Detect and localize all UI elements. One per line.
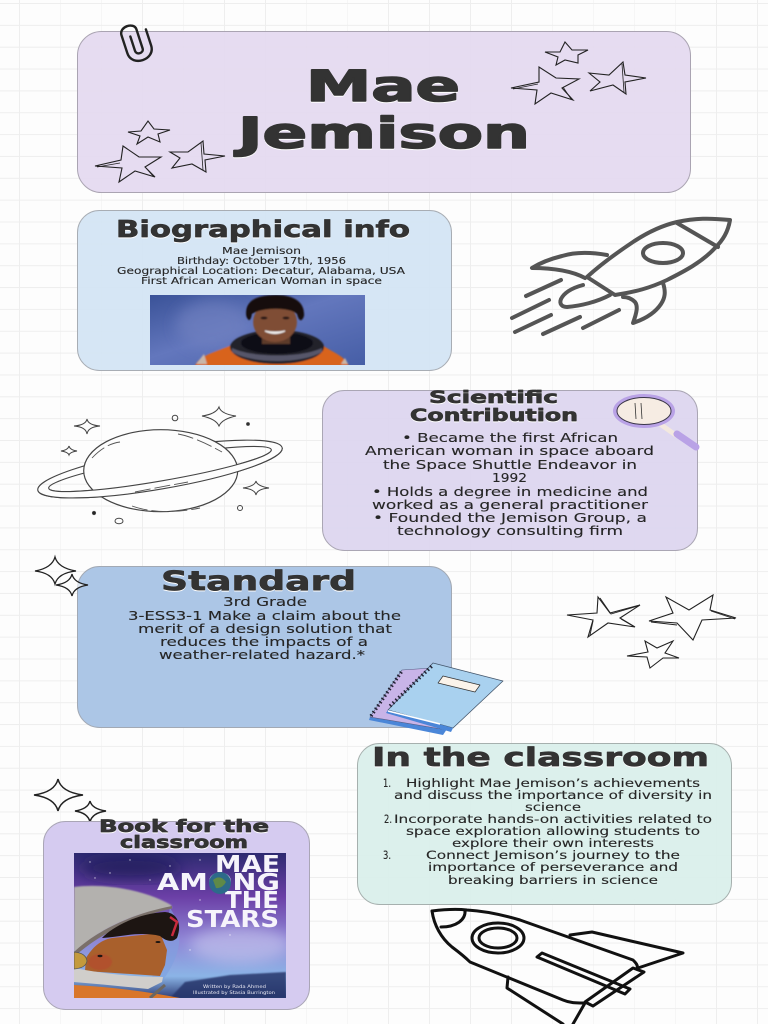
icon: stars bottom left xyxy=(95,121,225,182)
heading: in the classroom: In the classroom xyxy=(372,743,709,773)
text: standard description: 3rd Grade xyxy=(223,595,307,610)
image: book cover: Written by Rada Ahmed xyxy=(203,984,266,989)
text: contribution bullets: • Founded the Jemison Group, a xyxy=(373,511,647,526)
heading: book for the classroom: classroom xyxy=(120,833,248,852)
text: standard description: 3-ESS3-1 Make a claim about the xyxy=(128,609,401,624)
icon: magnifying glass xyxy=(613,394,696,447)
icon: paperclip xyxy=(119,21,155,64)
text: numbered classroom ideas: importance of perseverance and xyxy=(428,860,678,874)
text: numbered classroom ideas: space exploration allowing students to xyxy=(406,824,700,838)
text: contribution bullets: • Holds a degree in medicine and xyxy=(372,485,648,500)
text: biography details: First African American Woman in space xyxy=(141,276,382,287)
text: biography details: Geographical Location: Decatur, Alabama, USA xyxy=(117,266,405,277)
text: biography details: Mae Jemison xyxy=(222,246,301,257)
text: standard description: merit of a design solution that xyxy=(138,622,392,637)
icon: ringed planet xyxy=(34,407,286,524)
icon: grey rocket xyxy=(512,219,730,334)
text: standard description: weather-related hazard.* xyxy=(159,648,366,663)
text: contribution bullets: technology consulting firm xyxy=(397,524,623,539)
panel: scientific contribution xyxy=(322,388,698,550)
text: contribution bullets xyxy=(365,431,654,539)
text: contribution bullets: • Became the first African xyxy=(402,431,618,446)
text: numbered classroom ideas: 2. xyxy=(384,812,392,826)
heading: Mae Jemison: Jemison xyxy=(233,109,530,159)
text: numbered classroom ideas: explore their own interests xyxy=(452,836,654,850)
icon: notebooks xyxy=(369,663,503,735)
text: contribution bullets: worked as a general practitioner xyxy=(372,498,649,513)
text: numbered classroom ideas: Connect Jemison’s journey to the xyxy=(426,848,680,862)
text: standard description: reduces the impacts of a xyxy=(160,635,368,650)
icon: outlined stars right xyxy=(567,595,736,668)
panel: standard xyxy=(78,566,452,728)
icon: sparkles near book xyxy=(34,779,106,822)
text: standard description xyxy=(128,595,401,663)
heading: book for the classroom: Book for the xyxy=(99,817,269,836)
text: numbered classroom ideas: Incorporate hands-on activities related to xyxy=(394,812,712,826)
heading: Mae Jemison: Mae xyxy=(306,62,460,112)
image: book cover: MAE xyxy=(215,852,280,878)
panel: in the classroom xyxy=(358,743,732,904)
heading: scientific contribution xyxy=(410,388,578,426)
image: portrait of Mae Jemison xyxy=(150,295,365,366)
image: book cover: AMONG xyxy=(157,870,280,896)
heading: scientific contribution: Scientific xyxy=(429,388,558,408)
text: numbered classroom ideas: and discuss the importance of diversity in xyxy=(394,788,712,802)
heading: scientific contribution: Contribution xyxy=(410,406,578,426)
text: numbered classroom ideas: Highlight Mae Jemison’s achievements xyxy=(406,776,700,790)
text: biography details xyxy=(117,246,405,287)
heading: biographical info: Biographical info xyxy=(116,217,410,243)
icon: black outline rocket xyxy=(432,909,683,1024)
text: contribution bullets: 1992 xyxy=(492,471,527,486)
text: numbered classroom ideas: 1. xyxy=(383,776,391,790)
panel: book for the classroom xyxy=(44,817,310,1010)
text: contribution bullets: American woman in space aboard xyxy=(365,444,654,459)
heading: standard: Standard xyxy=(161,566,356,597)
image: book cover: Illustrated by Stasia Burrington xyxy=(193,990,275,995)
icon: planet sparkles xyxy=(61,407,269,524)
text: numbered classroom ideas: science xyxy=(525,800,581,814)
text: numbered classroom ideas: breaking barriers in science xyxy=(448,873,658,887)
text: numbered classroom ideas xyxy=(383,776,712,887)
image: book cover: THE xyxy=(225,888,279,914)
icon: sparkles near standard xyxy=(35,557,88,596)
heading: book for the classroom xyxy=(99,817,269,852)
text: biography details: Birthday: October 17th, 1956 xyxy=(177,256,346,267)
image: book cover: STARS xyxy=(186,907,279,933)
image: book cover xyxy=(74,852,290,998)
panel: title xyxy=(78,21,690,192)
text: contribution bullets: the Space Shuttle Endeavor in xyxy=(383,458,637,473)
panel: biographical info xyxy=(78,210,452,370)
heading: Mae Jemison xyxy=(233,62,530,159)
icon: stars top right xyxy=(511,42,646,104)
text: numbered classroom ideas: 3. xyxy=(383,848,391,862)
